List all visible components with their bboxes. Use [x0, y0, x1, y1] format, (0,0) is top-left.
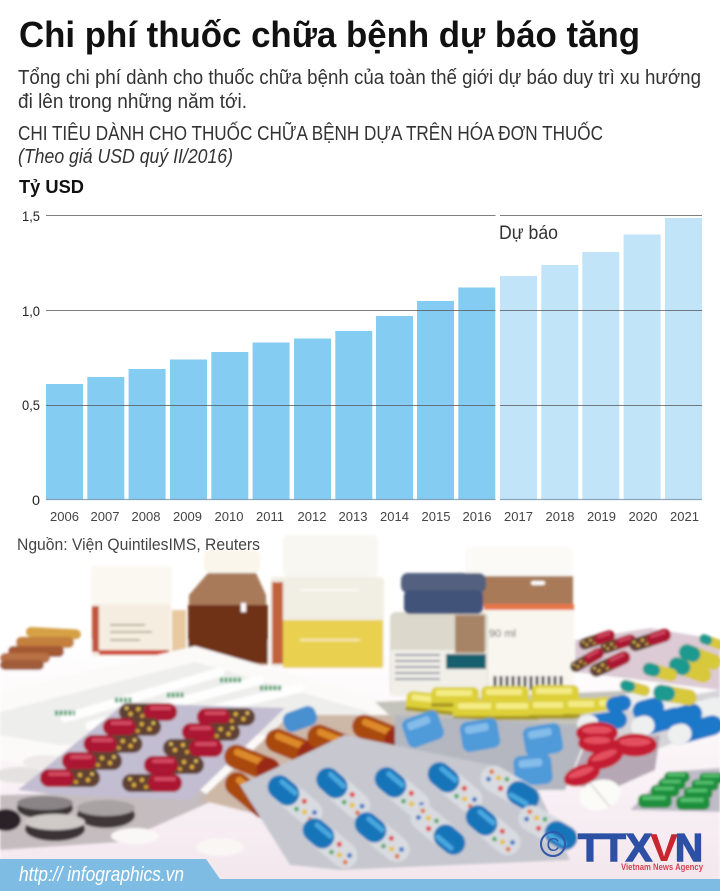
- logo: TTXVN: [541, 827, 703, 872]
- website address: http:// infographics.vn: [19, 864, 184, 886]
- logo wordmark: TTX: [578, 827, 652, 870]
- red capsule blister: [18, 703, 285, 800]
- x axis labels: 2009: [173, 509, 202, 524]
- axis unit label: Tỷ USD: [19, 177, 84, 197]
- logo wordmark: V: [650, 827, 678, 870]
- y axis labels: 1,0: [22, 304, 40, 319]
- x axis labels: 2019: [587, 509, 616, 524]
- bottle: amber syrup: [188, 550, 268, 665]
- source note: Nguồn: Viện QuintilesIMS, Reuters: [17, 535, 260, 554]
- bottle: big white jar with amber band: [465, 547, 574, 692]
- intro text: [18, 67, 701, 113]
- x axis labels: 2018: [546, 509, 574, 524]
- bars: forecast 2017-2021: [500, 218, 702, 500]
- gridlines: [46, 216, 702, 500]
- copyright mark: [541, 832, 565, 856]
- x axis labels: 2017: [504, 509, 533, 524]
- bottle: white jar with label: [91, 566, 186, 660]
- x axis labels: 2006: [50, 509, 79, 524]
- amber ampoules at left: [0, 627, 81, 670]
- photo ground: [0, 640, 720, 885]
- bottle: blue cap: [390, 573, 516, 696]
- bars: actual 2006-2016: [46, 288, 495, 500]
- blue and white capsules: [576, 689, 720, 750]
- dark tablets: [0, 755, 244, 856]
- red tablets: [561, 722, 660, 791]
- white tray with ampoules: [0, 646, 392, 800]
- intro text: đi lên trong những năm tới.: [18, 91, 247, 113]
- x axis labels: 2013: [339, 509, 367, 524]
- chart heading: [18, 121, 603, 168]
- y axis labels: [22, 209, 40, 508]
- white round tablet: [576, 775, 624, 815]
- green tablets blister: [630, 768, 720, 812]
- x axis labels: 2014: [380, 509, 409, 524]
- bottle: clear with yellow liquid: [270, 535, 384, 668]
- x axis labels: 2020: [629, 509, 657, 524]
- copyright mark: C: [546, 835, 560, 855]
- y axis labels: 0,5: [22, 398, 40, 413]
- x axis labels: 2007: [91, 509, 119, 524]
- y axis labels: 1,5: [22, 209, 40, 224]
- blue multicolour capsule blister: [240, 735, 582, 874]
- x axis labels: 2010: [215, 509, 243, 524]
- x axis labels: 2021: [670, 509, 699, 524]
- yellow capsule row: [375, 685, 642, 725]
- bottom blue band with tab: [0, 859, 720, 891]
- logo wordmark: N: [675, 827, 703, 870]
- photo: medicine bottles and blister packs: [0, 535, 720, 885]
- x axis labels: 2011: [256, 509, 284, 524]
- bar chart: [22, 209, 702, 524]
- logo wordmark: [578, 827, 703, 870]
- amber capsules: [200, 704, 466, 823]
- y axis labels: 0: [32, 493, 40, 508]
- x axis labels: 2012: [298, 509, 326, 524]
- forecast label: Dự báo: [499, 223, 558, 244]
- chart heading: (Theo giá USD quý II/2016): [18, 146, 233, 168]
- red and teal capsules top right: [568, 627, 720, 707]
- chart heading: CHI TIÊU DÀNH CHO THUỐC CHỮA BỆNH DỰA TRÊN HÓA ĐƠN THUỐC: [18, 121, 603, 145]
- x axis labels: 2016: [463, 509, 491, 524]
- title: Chi phí thuốc chữa bệnh dự báo tăng: [19, 14, 640, 55]
- blue tablets on silver blister: [395, 708, 583, 790]
- logo tagline: Vietnam News Agency: [621, 862, 703, 872]
- x axis labels: 2015: [422, 509, 450, 524]
- x axis labels: 2008: [132, 509, 160, 524]
- bottle: blue cap: 90 ml: [489, 628, 516, 640]
- x axis labels: [50, 509, 699, 524]
